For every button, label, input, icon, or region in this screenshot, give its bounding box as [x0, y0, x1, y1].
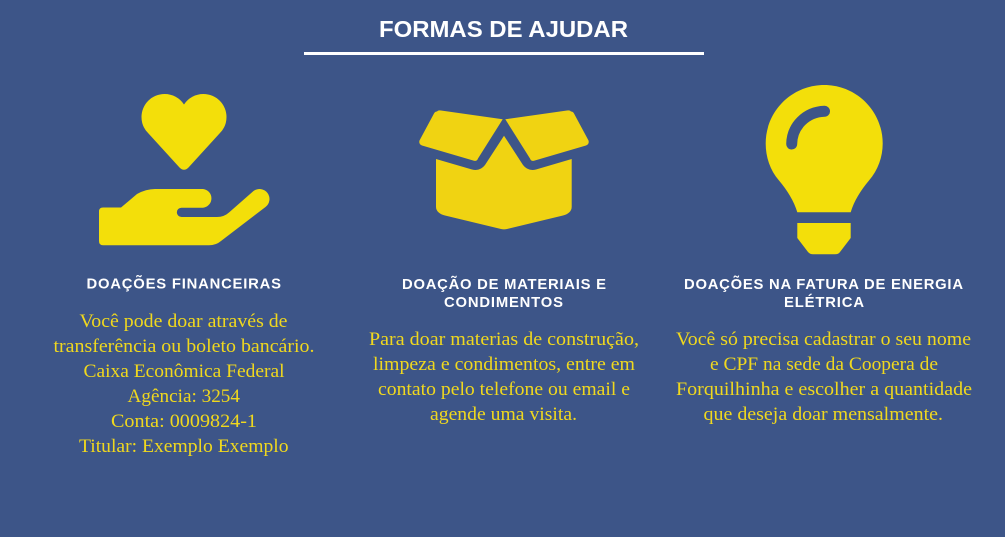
text block: transferência ou boleto bancário. — [54, 336, 314, 357]
icon: light bulb — [766, 85, 883, 254]
text block: limpeza e condimentos, entre em — [373, 354, 636, 375]
text block: Você pode doar através de — [80, 311, 288, 332]
text block: Caixa Econômica Federal — [84, 361, 284, 382]
text block: Agência: 3254 — [128, 386, 240, 407]
text block: e CPF na sede da Coopera de — [710, 354, 938, 375]
panel: financial donations — [54, 94, 314, 457]
panel: energy bill donations — [676, 85, 972, 425]
panel: energy bill donations: ELÉTRICA — [784, 294, 864, 311]
panel: material donations: CONDIMENTOS — [444, 295, 563, 311]
text block: Você só precisa cadastrar o seu nome — [676, 329, 971, 350]
heading: DOAÇÕES FINANCEIRAS — [86, 274, 281, 292]
text block: Para doar materias de construção, — [369, 329, 639, 350]
text block: agende uma visita. — [430, 404, 577, 425]
text block — [54, 311, 314, 457]
text block: Titular: Exemplo Exemplo — [79, 436, 288, 457]
panel: material donations — [369, 110, 639, 425]
text block: contato pelo telefone ou email e — [378, 379, 630, 400]
heading: DOAÇÕES NA FATURA DE ENERGIA — [684, 275, 963, 293]
text block: Forquilhinha e escolher a quantidade — [676, 379, 972, 400]
text block: que deseja doar mensalmente. — [704, 404, 943, 425]
icon: heart over open hand — [99, 94, 270, 245]
text block — [676, 329, 972, 425]
text block — [369, 329, 639, 425]
text block: Conta: 0009824-1 — [111, 411, 257, 432]
heading: DOAÇÃO DE MATERIAIS E — [402, 275, 606, 293]
icon: open box — [419, 110, 589, 229]
title — [304, 16, 704, 55]
title: FORMAS DE AJUDAR — [379, 16, 628, 42]
